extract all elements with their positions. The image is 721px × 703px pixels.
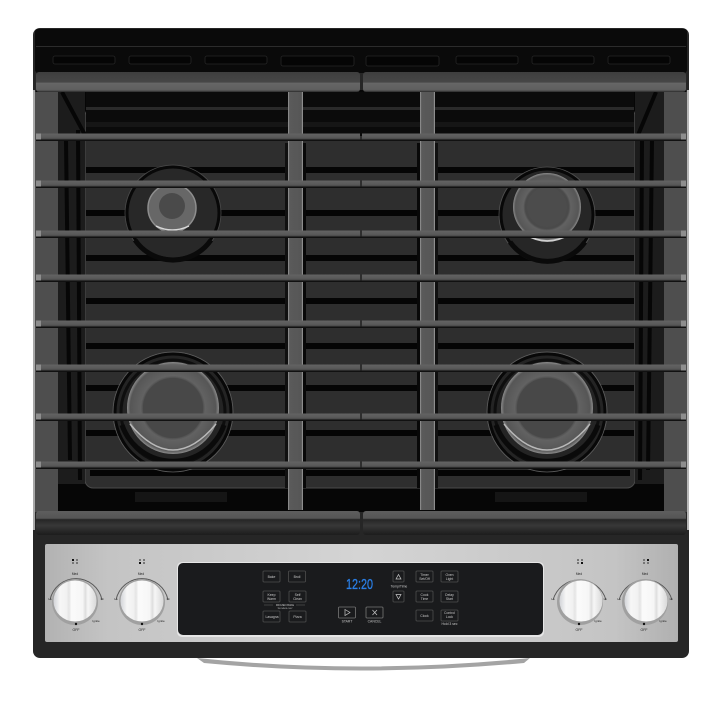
button labels: Broil <box>294 575 301 579</box>
knob: left 1: OFF <box>72 628 80 632</box>
button labels: Pizza <box>293 615 302 619</box>
grate: horizontal bars <box>36 134 686 469</box>
knob: right 1 <box>551 559 607 632</box>
knob: right 2 <box>617 559 673 632</box>
knob: left 1 <box>48 559 104 632</box>
grate: side posts <box>35 92 687 512</box>
button labels: Set/Off <box>419 577 430 581</box>
button labels: Warm <box>267 597 276 601</box>
knob: left 2: Med <box>138 572 144 576</box>
knob: left 2 <box>114 559 170 632</box>
knob: right 2: OFF <box>640 628 648 632</box>
button labels: START <box>342 620 352 624</box>
button labels: FROZEN BAKE <box>276 603 294 607</box>
knob: right 2: Ignite <box>659 619 667 623</box>
knob: right 2: Med <box>642 572 648 576</box>
button labels: Lock <box>446 615 453 619</box>
grate: front frame <box>36 511 686 535</box>
button labels: Cook <box>421 593 429 597</box>
knob: right 1: Hi <box>604 597 607 601</box>
knob: right 1: Lo <box>551 597 555 601</box>
grate: rear frame <box>36 72 686 92</box>
button labels: Clean <box>293 597 302 601</box>
button labels: CANCEL <box>368 620 381 624</box>
knob: left 1: Hi <box>101 597 104 601</box>
button labels: Clock <box>420 614 429 618</box>
button labels: Bake <box>268 575 275 579</box>
button labels: Self <box>295 593 300 597</box>
burner: rear left <box>125 165 221 261</box>
button labels: Temp/Time <box>391 584 407 588</box>
button labels: TECHNOLOGY <box>277 608 293 610</box>
knob: right 1: OFF <box>576 628 582 632</box>
button labels: Oven <box>445 573 454 577</box>
button labels: Control <box>444 611 455 615</box>
button labels: Delay <box>445 593 454 597</box>
knob: left 2: Hi <box>167 597 170 601</box>
button labels <box>265 573 458 626</box>
button labels: Time <box>421 597 428 601</box>
knob: left 2: Lo <box>114 597 118 601</box>
knob: left 1: Lo <box>48 597 52 601</box>
button labels: Timer <box>420 573 430 577</box>
clock display: 12:20 <box>346 576 373 593</box>
display panel <box>177 562 544 637</box>
knob: left 1: Ignite <box>92 619 100 623</box>
knob: right 2: Hi <box>670 597 673 601</box>
burner: front right <box>487 352 607 472</box>
control buttons <box>263 571 458 622</box>
control panel <box>45 544 678 642</box>
knob: left 2: Ignite <box>157 619 165 623</box>
knob: right 1: Med <box>576 572 582 576</box>
knob: right 2: Lo <box>617 597 621 601</box>
button labels: Light <box>446 577 453 581</box>
button labels: Start <box>446 597 453 601</box>
button labels: Keep <box>268 593 276 597</box>
handle under the panel <box>197 658 530 670</box>
button labels: Hold 3 sec <box>441 622 458 626</box>
knob: right 1: Ignite <box>594 619 602 623</box>
burner: front left <box>113 352 233 472</box>
knob: left 2: OFF <box>138 628 146 632</box>
button labels: Lasagna <box>265 615 279 619</box>
button icons <box>345 574 401 616</box>
knob: left 1: Med <box>72 572 78 576</box>
rear vent strip <box>35 29 687 73</box>
grate: vertical bars <box>285 92 438 510</box>
burner: rear right <box>499 167 595 263</box>
cooktop pan <box>36 90 686 512</box>
